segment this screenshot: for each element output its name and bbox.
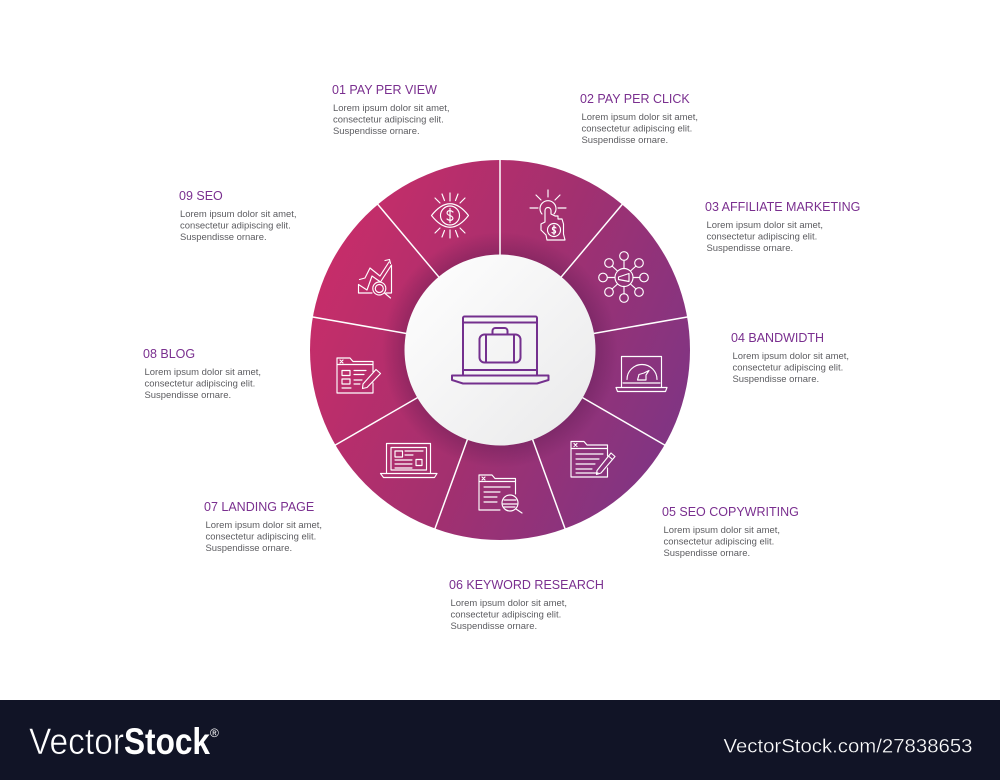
icon: laptop with page layout bbox=[380, 444, 437, 478]
text: 01 pay per view: 01 PAY PER VIEW bbox=[332, 83, 437, 97]
text: 01 pay per view: Lorem ipsum dolor sit amet, bbox=[333, 103, 449, 114]
text: 09 seo: consectetur adipiscing elit. bbox=[180, 220, 291, 232]
text: 07 landing page: Lorem ipsum dolor sit amet, bbox=[206, 520, 322, 531]
segment separators bbox=[311, 158, 689, 530]
text: 09 seo bbox=[179, 189, 296, 243]
text: 02 pay per click: consectetur adipiscing elit. bbox=[582, 124, 692, 134]
text: 04 bandwidth: consectetur adipiscing elit. bbox=[732, 362, 843, 374]
registered mark: ® bbox=[210, 726, 219, 740]
text: 03 affiliate marketing: Lorem ipsum dolor sit amet, bbox=[706, 220, 823, 231]
text: 03 affiliate marketing bbox=[705, 200, 860, 254]
text: 04 bandwidth: Suspendisse ornare. bbox=[732, 374, 819, 385]
icon: document with magnifier bbox=[479, 475, 522, 513]
text: 09 seo: Lorem ipsum dolor sit amet, bbox=[180, 209, 296, 220]
text: 05 seo copywriting: 05 SEO COPYWRITING bbox=[662, 505, 799, 519]
text: 06 keyword research: consectetur adipiscing elit. bbox=[450, 610, 561, 620]
text: 08 blog bbox=[143, 347, 261, 401]
icon: rising chart with magnifier bbox=[358, 260, 392, 298]
icon: network with megaphone bbox=[599, 252, 648, 302]
footer bar bbox=[0, 700, 1000, 780]
text: 04 bandwidth: 04 BANDWIDTH bbox=[731, 331, 824, 345]
text: 08 blog: Suspendisse ornare. bbox=[144, 390, 231, 401]
text: 06 keyword research: Suspendisse ornare. bbox=[450, 621, 537, 632]
icon: eye with dollar bbox=[432, 193, 468, 238]
text: 05 seo copywriting: Lorem ipsum dolor sit amet, bbox=[664, 525, 780, 536]
ring gradient fill bbox=[310, 160, 690, 540]
text: 07 landing page bbox=[204, 500, 322, 554]
text: 05 seo copywriting: consectetur adipiscing elit. bbox=[664, 536, 774, 548]
icon: hand click with dollar bbox=[530, 190, 566, 240]
donut ring of nine segments bbox=[310, 158, 690, 540]
text: 03 affiliate marketing: consectetur adipiscing elit. bbox=[706, 232, 817, 242]
text: 07 landing page: consectetur adipiscing elit. bbox=[206, 532, 316, 542]
text: 08 blog: Lorem ipsum dolor sit amet, bbox=[144, 367, 261, 378]
text: 03 affiliate marketing: Suspendisse ornare. bbox=[706, 243, 793, 254]
text: 04 bandwidth bbox=[731, 331, 849, 385]
text: 07 landing page: Suspendisse ornare. bbox=[206, 543, 292, 554]
text: 02 pay per click: Suspendisse ornare. bbox=[582, 135, 668, 146]
text: 08 blog: 08 BLOG bbox=[143, 347, 195, 361]
footer logo: Vector bbox=[29, 721, 124, 762]
text: 06 keyword research: 06 KEYWORD RESEARCH bbox=[449, 578, 604, 592]
footer logo: Stock bbox=[124, 721, 210, 762]
text: 05 seo copywriting: Suspendisse ornare. bbox=[664, 548, 750, 559]
text: 03 affiliate marketing: 03 AFFILIATE MARKETING bbox=[705, 200, 860, 214]
center circle bbox=[404, 254, 596, 446]
text: 05 seo copywriting bbox=[662, 505, 799, 559]
text: 09 seo: 09 SEO bbox=[179, 189, 223, 203]
text: 01 pay per view: consectetur adipiscing elit. bbox=[333, 114, 444, 126]
text: 06 keyword research bbox=[449, 578, 604, 632]
text: 01 pay per view bbox=[332, 83, 449, 137]
text: 01 pay per view: Suspendisse ornare. bbox=[333, 126, 420, 137]
footer logo bbox=[29, 721, 210, 762]
icon: laptop with gauge bbox=[616, 356, 667, 392]
center shadow bbox=[382, 232, 618, 468]
text: 06 keyword research: Lorem ipsum dolor sit amet, bbox=[450, 598, 567, 609]
icon: blog page with pencil bbox=[337, 358, 380, 393]
text: 04 bandwidth: Lorem ipsum dolor sit amet, bbox=[732, 351, 849, 362]
text: 02 pay per click: 02 PAY PER CLICK bbox=[580, 92, 690, 106]
text: 08 blog: consectetur adipiscing elit. bbox=[144, 378, 255, 390]
icon: laptop with briefcase bbox=[452, 316, 548, 384]
text: 07 landing page: 07 LANDING PAGE bbox=[204, 500, 314, 514]
text: 02 pay per click: Lorem ipsum dolor sit amet, bbox=[582, 112, 698, 123]
text: 02 pay per click bbox=[580, 92, 698, 146]
text: 09 seo: Suspendisse ornare. bbox=[180, 232, 267, 243]
icon: document with pencil bbox=[571, 442, 615, 477]
footer url: VectorStock.com/27838653 bbox=[724, 736, 972, 758]
